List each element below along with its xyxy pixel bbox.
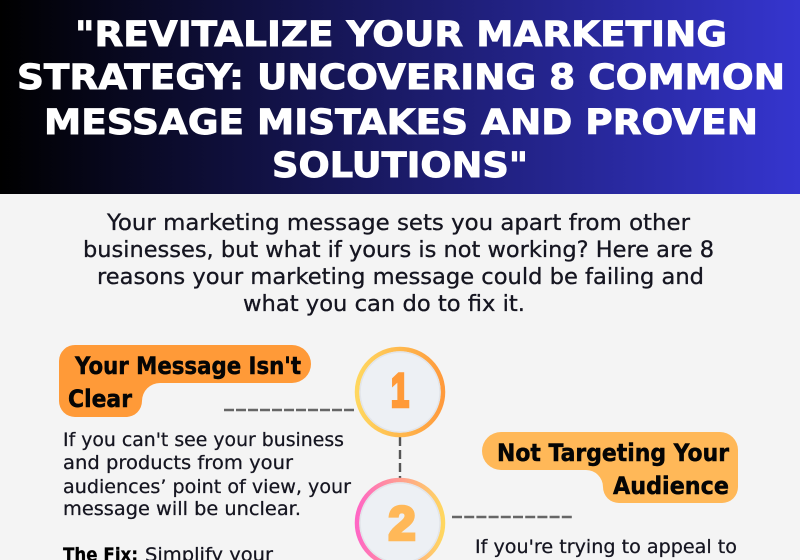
heading badge: Not Targeting Your Audience bbox=[482, 432, 738, 503]
heading badge: Your Message Isn't Clear: Clear bbox=[68, 385, 132, 413]
header banner bbox=[0, 0, 800, 194]
number badge 2 bbox=[357, 480, 443, 560]
body text 1: audiences’ point of view, your bbox=[63, 476, 351, 498]
number badge 2: 2 bbox=[388, 496, 416, 550]
intro text: reasons your marketing message could be failing and bbox=[97, 265, 704, 290]
intro text bbox=[83, 211, 714, 317]
timeline connector bbox=[399, 437, 401, 478]
number badge 1 bbox=[357, 349, 443, 435]
intro text: businesses, but what if yours is not working? Here are 8 bbox=[83, 238, 714, 263]
title bbox=[17, 15, 785, 186]
title: SOLUTIONS" bbox=[272, 146, 528, 186]
heading badge: Not Targeting Your Audience: Audience bbox=[613, 472, 729, 500]
intro text: what you can do to fix it. bbox=[243, 292, 525, 317]
title: STRATEGY: UNCOVERING 8 COMMON bbox=[17, 58, 785, 98]
heading badge: Your Message Isn't Clear: Your Message Isn't bbox=[74, 352, 301, 380]
body text 1 bbox=[63, 429, 351, 560]
heading badge: Not Targeting Your Audience: Not Targeting Your bbox=[497, 439, 729, 467]
heading badge: Your Message Isn't Clear bbox=[59, 345, 311, 417]
title: "REVITALIZE YOUR MARKETING bbox=[75, 15, 727, 55]
intro text: Your marketing message sets you apart from other bbox=[106, 211, 691, 236]
title: MESSAGE MISTAKES AND PROVEN bbox=[44, 103, 758, 143]
dashed connector 2 bbox=[452, 516, 574, 518]
number badge 1: 1 bbox=[391, 364, 409, 416]
body text 1: message will be unclear. bbox=[63, 498, 301, 520]
body text 1: If you can't see your business bbox=[63, 429, 344, 451]
body text 2: If you're trying to appeal to bbox=[475, 536, 737, 558]
panel: not targeting audience bbox=[452, 432, 738, 558]
body text 1: and products from your bbox=[63, 452, 293, 474]
dashed connector 1 bbox=[224, 409, 356, 411]
panel: message not clear bbox=[59, 345, 356, 560]
